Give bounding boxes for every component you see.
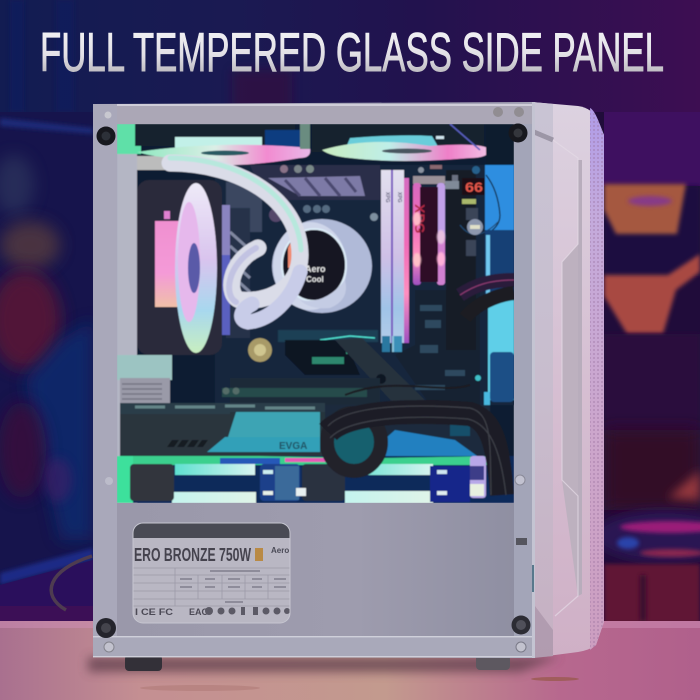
blue rear lighting: [460, 165, 514, 432]
top RGB fan left: [135, 124, 310, 165]
PC case body: [93, 102, 604, 658]
thumbscrews: [96, 124, 530, 638]
pump block: Cool: [306, 275, 324, 284]
certification marks: I CE FC: [135, 607, 173, 618]
debug LED display: [462, 178, 486, 195]
case front panel: [532, 102, 604, 658]
PSU shroud: [117, 503, 514, 636]
graphics card: EVGA: [279, 441, 307, 452]
glass window interior: [117, 124, 515, 504]
RAM modules: XPG: [384, 192, 390, 203]
wooden table: [0, 621, 700, 700]
specification table: [133, 568, 290, 606]
bundled black cables: [327, 280, 514, 495]
XPG memory stick with RGB: [412, 176, 445, 285]
PSU label seen through cutout: EAC: [189, 607, 209, 617]
debug LED display: 66: [465, 179, 483, 195]
pump block: [272, 219, 372, 313]
top RGB fan right: [312, 124, 487, 162]
left and top frame rails: [93, 102, 535, 658]
left radiator fan: [137, 180, 222, 355]
RAM modules: [381, 170, 409, 352]
PSU label seen through cutout: [133, 523, 290, 623]
power cable behind case: [51, 556, 92, 610]
graphics card: [120, 403, 490, 458]
motherboard: [214, 165, 515, 405]
bottom rail: [93, 636, 532, 657]
PSU model text: ERO BRONZE 750W: [134, 544, 251, 565]
case feet: [125, 655, 510, 671]
bronze badge: [255, 548, 263, 561]
bottom RGB fans: [117, 456, 514, 503]
small case details: [104, 107, 534, 652]
brand logo text: Aero: [271, 546, 289, 555]
RAM modules: XPG: [396, 192, 402, 203]
sleeved coolant tubes: [170, 158, 301, 322]
motherboard: ROG: [345, 347, 364, 356]
XPG memory stick with RGB: XPG: [412, 204, 428, 234]
pump block: Aero: [305, 264, 326, 274]
left riser and rear panel: [117, 124, 172, 504]
